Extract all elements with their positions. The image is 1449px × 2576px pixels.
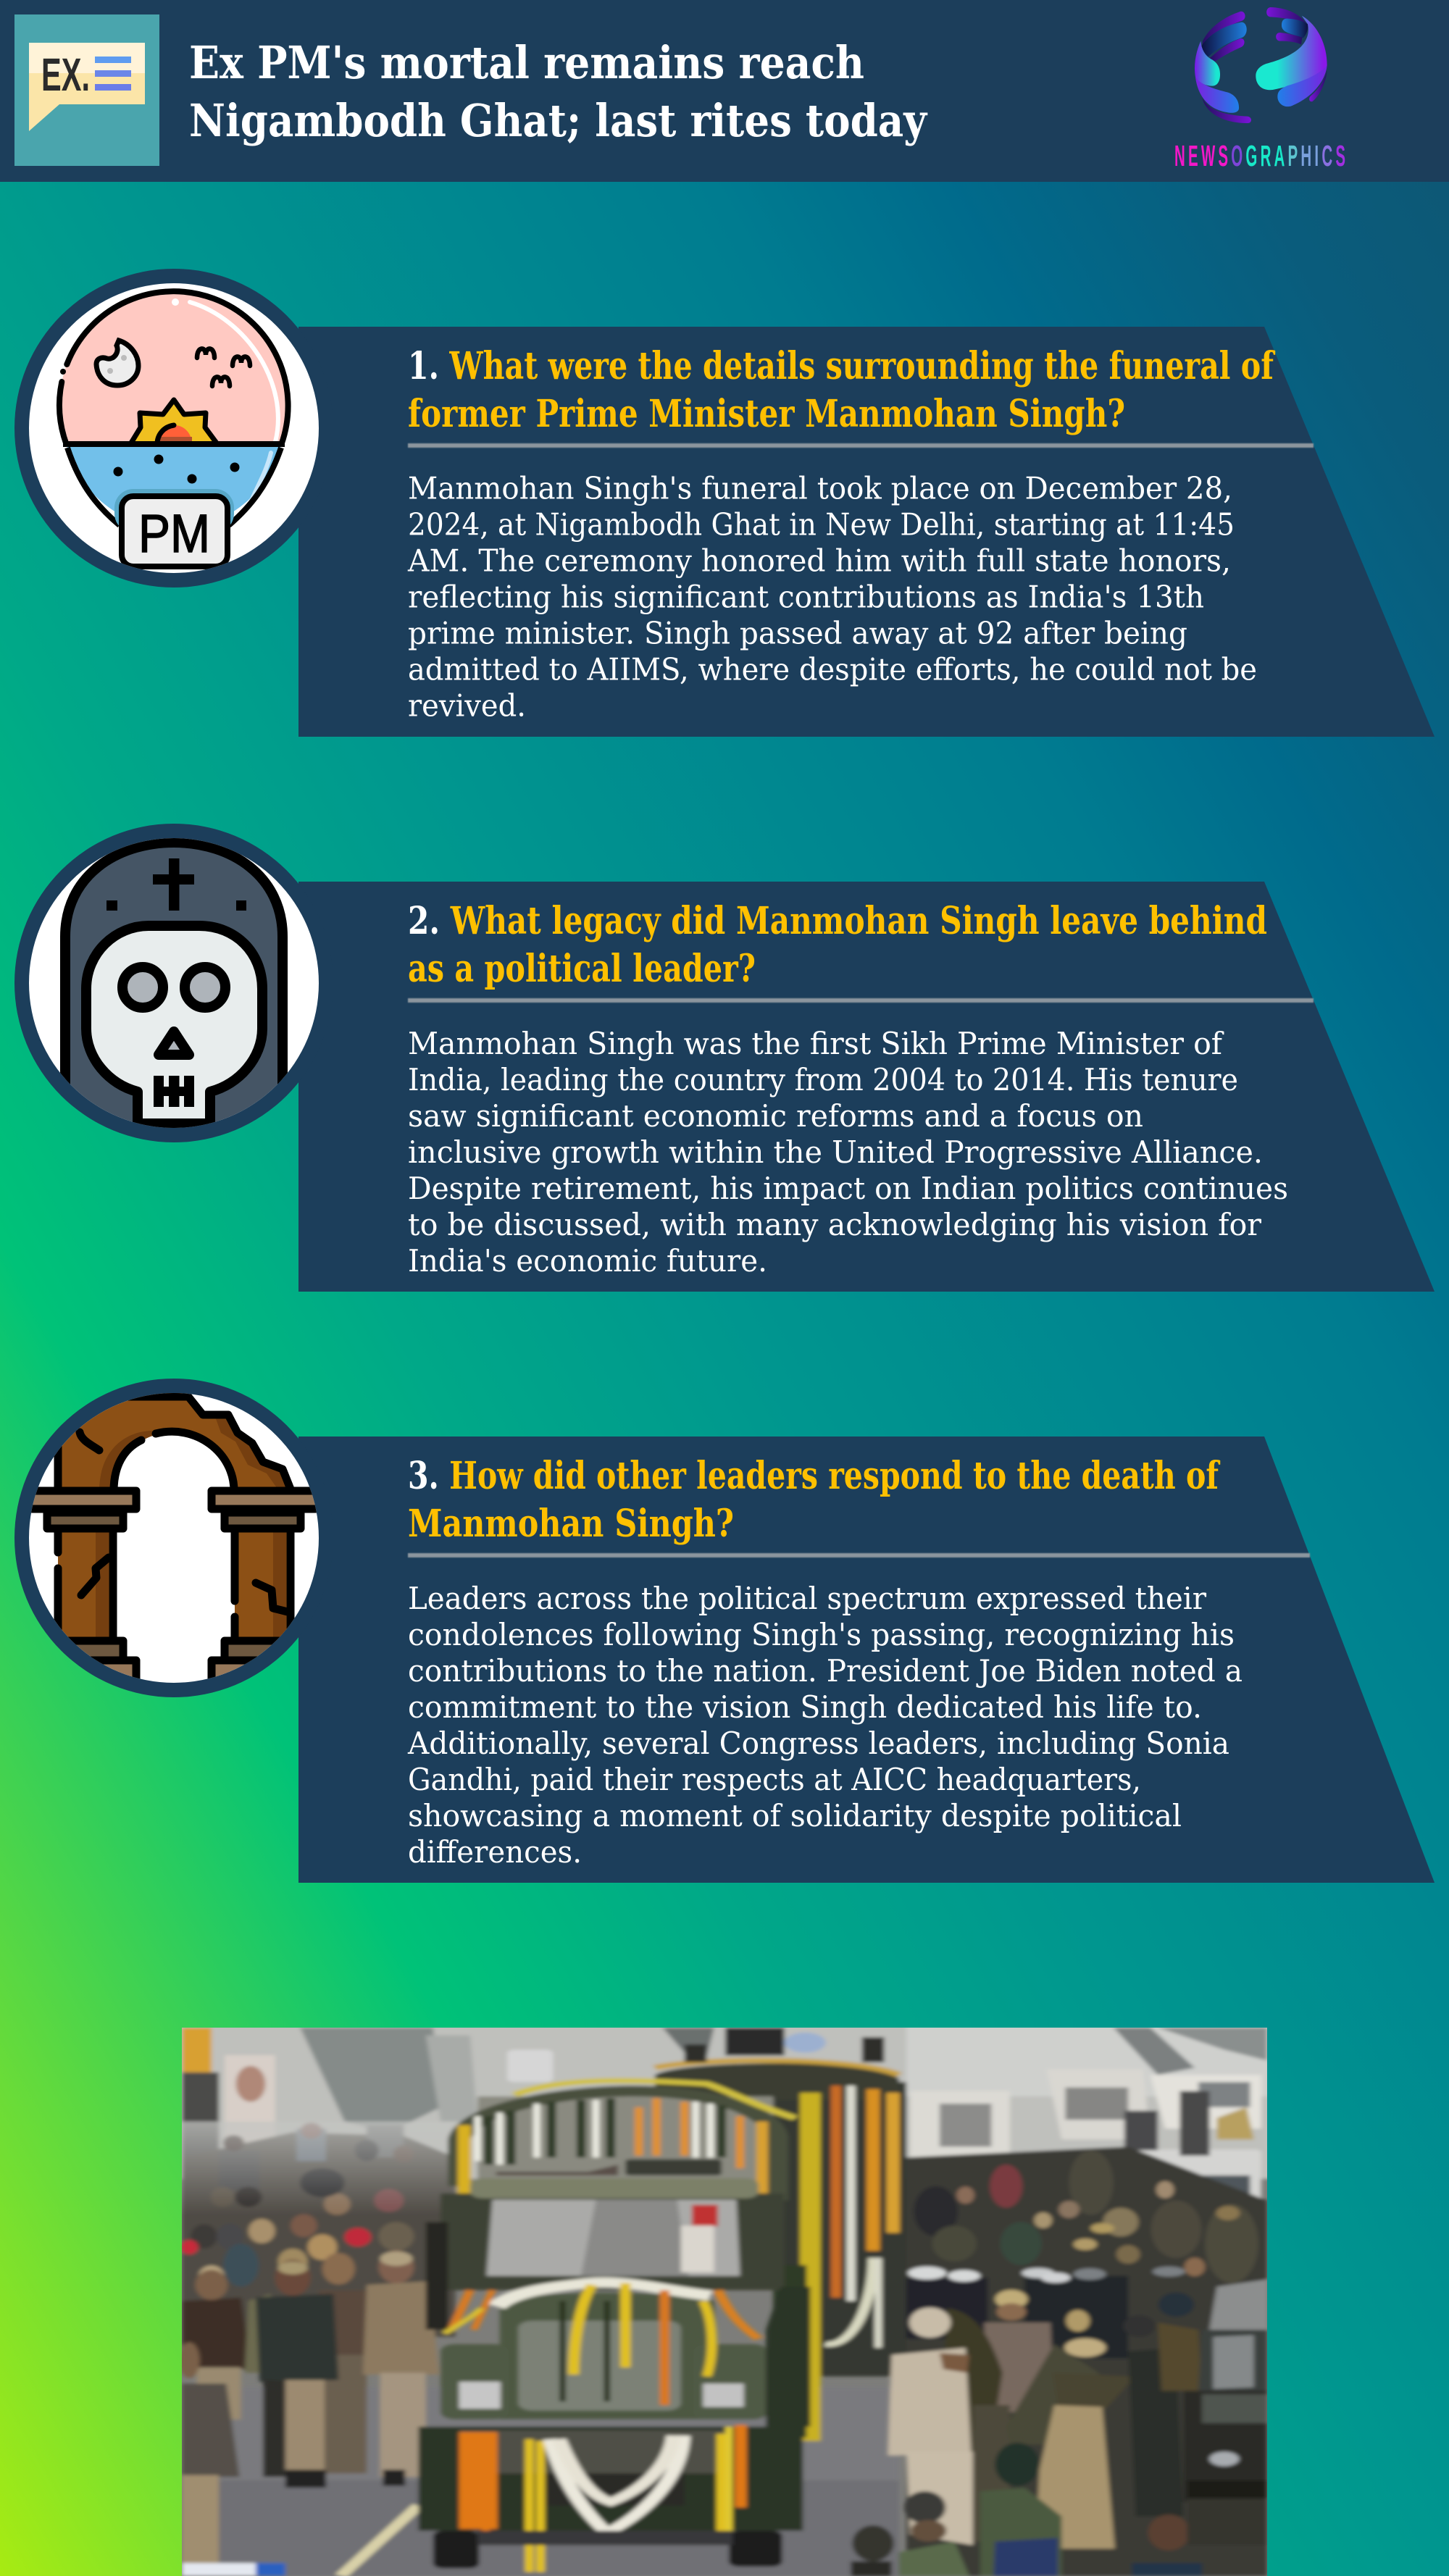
- icon: EX speech bubble logo: EX.: [41, 49, 90, 101]
- icon: hooded skull in circle: [14, 824, 333, 1159]
- crowd right: [851, 2146, 1267, 2576]
- body text: question 1: AM. The ceremony honored him with full state honors,: [407, 543, 1231, 579]
- heading: question 2: [408, 899, 1267, 991]
- body text: question 3: commitment to the vision Singh dedicated his life to.: [408, 1689, 1202, 1725]
- heading: question 3: 3. How did other leaders respond to the death of: [408, 1454, 1221, 1498]
- body text: question 3: Leaders across the political spectrum expressed their: [408, 1581, 1207, 1616]
- title: Nigambodh Ghat; last rites today: [189, 94, 928, 147]
- body text: question 1: prime minister. Singh passed away at 92 after being: [408, 616, 1187, 651]
- body text: question 3: [407, 1581, 1243, 1870]
- body text: question 3: Additionally, several Congress leaders, including Sonia: [407, 1726, 1229, 1761]
- body text: question 3: showcasing a moment of solidarity despite political: [408, 1798, 1182, 1833]
- second truck: [655, 2037, 906, 2441]
- body text: question 1: revived.: [408, 688, 526, 724]
- jeep right: [1184, 2280, 1267, 2545]
- brand name: NEWSOGRAPHICS: [1174, 139, 1345, 172]
- body text: question 3: differences.: [408, 1834, 582, 1870]
- title: [189, 36, 928, 147]
- body text: question 3: condolences following Singh's passing, recognizing his: [408, 1617, 1235, 1652]
- icon: Newsographics globe logo: [1195, 7, 1327, 123]
- body text: question 2: Manmohan Singh was the first Sikh Prime Minister of: [408, 1026, 1224, 1061]
- title: Ex PM's mortal remains reach: [189, 36, 864, 89]
- heading: question 3: Manmohan Singh?: [408, 1502, 734, 1546]
- body text: question 3: contributions to the nation. President Joe Biden noted a: [408, 1653, 1243, 1689]
- photo: funeral truck procession with crowd: [175, 2025, 1276, 2576]
- officers left: [179, 2251, 439, 2576]
- body text: question 1: 2024, at Nigambodh Ghat in New Delhi, starting at 11:45: [408, 507, 1235, 543]
- body text: question 3: Gandhi, paid their respects at AICC headquarters,: [408, 1762, 1141, 1797]
- body text: question 2: India, leading the country from 2004 to 2014. His tenure: [408, 1062, 1238, 1097]
- body text: question 2: Despite retirement, his impact on Indian politics continues: [408, 1171, 1288, 1206]
- heading: question 2: as a political leader?: [408, 947, 756, 991]
- icon: PM sunset globe in circle: [14, 269, 333, 587]
- panel: question 3: [14, 1376, 1435, 1883]
- body text: question 2: to be discussed, with many acknowledging his vision for: [408, 1207, 1262, 1242]
- body text: question 2: saw significant economic reforms and a focus on: [408, 1098, 1143, 1134]
- body text: question 1: reflecting his significant contributions as India's 13th: [408, 580, 1204, 615]
- body text: question 2: India's economic future.: [408, 1243, 767, 1279]
- icon: ruined arch in circle: [14, 1376, 333, 1697]
- body text: question 1: [407, 471, 1257, 724]
- heading: question 1: [408, 344, 1276, 436]
- body text: question 1: Manmohan Singh's funeral took place on December 28,: [408, 471, 1232, 506]
- heading: question 1: former Prime Minister Manmohan Singh?: [408, 392, 1125, 436]
- body text: question 1: admitted to AIIMS, where despite efforts, he could not be: [408, 652, 1257, 687]
- header bar: [0, 0, 1449, 182]
- body text: question 2: [408, 1026, 1288, 1279]
- icon: EX speech bubble logo: [14, 14, 159, 166]
- panel: question 2: [14, 824, 1435, 1292]
- front truck: [419, 2081, 810, 2572]
- icon: PM sunset globe in circle: PM: [138, 503, 210, 564]
- body text: question 2: inclusive growth within the United Progressive Alliance.: [408, 1134, 1263, 1170]
- panel: question 1: [14, 269, 1435, 737]
- heading: question 2: 2. What legacy did Manmohan Singh leave behind: [408, 899, 1267, 943]
- heading: question 3: [408, 1454, 1221, 1546]
